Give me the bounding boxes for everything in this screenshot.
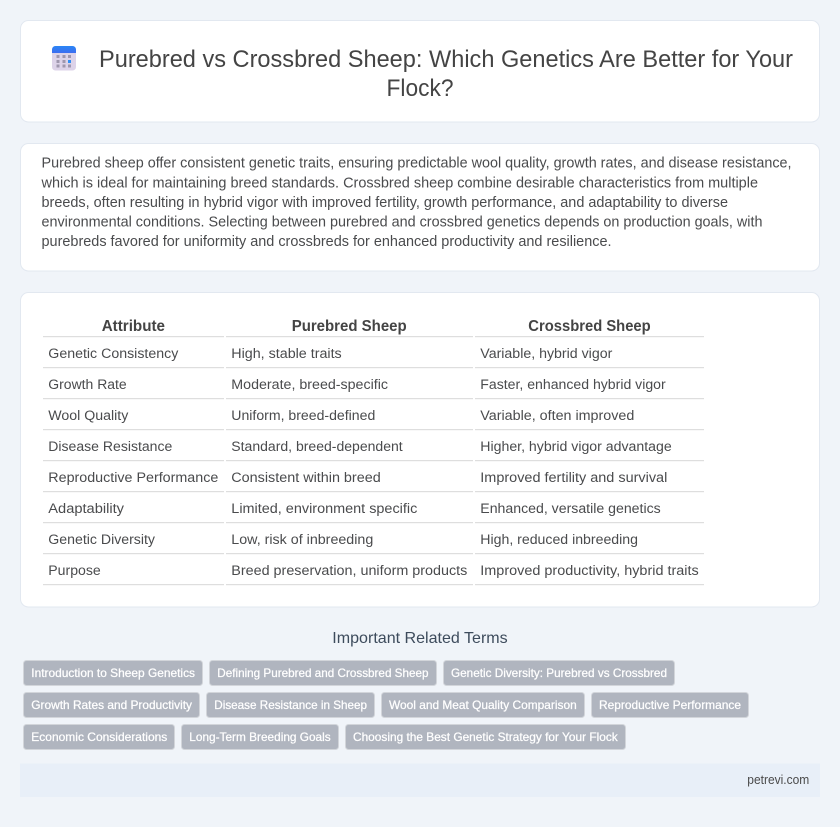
table row: adaptability: Enhanced, versatile genetics: [480, 501, 661, 517]
table row: growth rate: Moderate, breed-specific: [231, 377, 388, 393]
tag: disease resistance in sheep: [206, 692, 374, 718]
table row: wool quality: [48, 408, 634, 424]
related term tags: [24, 660, 748, 750]
tag: defining purebred and crossbred sheep: Defining Purebred and Crossbred Sheep: [217, 666, 429, 680]
tag: wool and meat quality comparison: Wool and Meat Quality Comparison: [389, 698, 577, 712]
table row: adaptability: Limited, environment specific: [231, 501, 417, 517]
table row: adaptability: [48, 501, 661, 517]
footer source: petrevi.com: [747, 772, 809, 787]
text block: introduction paragraph: environmental conditions. Selecting between purebred and crossbred genetics depends on production goals, with: [42, 214, 762, 230]
tag: introduction to sheep genetics: Introduction to Sheep Genetics: [31, 666, 195, 680]
table row: disease resistance: Standard, breed-dependent: [231, 439, 403, 455]
table row: purpose: Purpose: [48, 563, 101, 579]
table row: reproductive performance: Reproductive Performance: [48, 470, 218, 486]
tag: wool and meat quality comparison: [382, 692, 584, 718]
tag: introduction to sheep genetics: [24, 660, 202, 686]
table row: reproductive performance: Improved fertility and survival: [480, 470, 667, 486]
tag: defining purebred and crossbred sheep: [210, 660, 436, 686]
table row: purpose: Improved productivity, hybrid traits: [480, 563, 699, 579]
tag: disease resistance in sheep: Disease Resistance in Sheep: [214, 698, 367, 712]
table row: reproductive performance: Consistent within breed: [231, 470, 381, 486]
heading: important related terms: Important Related Terms: [332, 630, 508, 647]
tag: growth rates and productivity: Growth Rates and Productivity: [31, 698, 192, 712]
table row: wool quality: Wool Quality: [48, 408, 129, 424]
text block: introduction paragraph: which is ideal for maintaining breed standards. Crossbred sheep combine desirable characteristics from multiple: [40, 176, 758, 192]
tag: reproductive performance: Reproductive Performance: [599, 698, 741, 712]
table row: wool quality: Variable, often improved: [480, 408, 634, 424]
tag: choosing the best genetic strategy: [346, 724, 626, 750]
table header: Crossbred Sheep: [528, 318, 651, 335]
text block: introduction paragraph: purebreds favored for uniformity and crossbreds for enhanced productivity and resilience.: [42, 234, 612, 250]
table row: disease resistance: Disease Resistance: [48, 439, 172, 455]
icon: calendar: [52, 46, 76, 70]
title: Flock?: [386, 75, 454, 102]
table row: genetic consistency: Variable, hybrid vigor: [480, 346, 613, 362]
tag: genetic diversity: Genetic Diversity: Purebred vs Crossbred: [451, 666, 667, 680]
table row: genetic consistency: Genetic Consistency: [48, 346, 179, 362]
title: [99, 46, 793, 102]
table row: disease resistance: [48, 439, 672, 455]
table row: purpose: Breed preservation, uniform products: [231, 563, 467, 579]
table row: purpose: [48, 563, 699, 579]
text block: introduction paragraph: breeds, often resulting in hybrid vigor with improved fertility, growth performance, and adaptability to diverse: [42, 195, 728, 211]
table row: genetic diversity: Low, risk of inbreeding: [231, 532, 373, 548]
text block: introduction paragraph: [40, 156, 792, 250]
tag: genetic diversity: [444, 660, 674, 686]
tag: long-term breeding goals: [182, 724, 338, 750]
table row: reproductive performance: [48, 470, 667, 486]
table row: genetic diversity: [48, 532, 638, 548]
table header: [102, 318, 651, 335]
table row: genetic diversity: High, reduced inbreeding: [480, 532, 638, 548]
table row: disease resistance: Higher, hybrid vigor advantage: [480, 439, 672, 455]
panel: comparison table: [20, 292, 820, 607]
tag: reproductive performance: [592, 692, 748, 718]
table header: Purebred Sheep: [292, 318, 407, 335]
title: Purebred vs Crossbred Sheep: Which Genetics Are Better for Your: [99, 46, 793, 73]
text block: introduction paragraph: Purebred sheep offer consistent genetic traits, ensuring predictable wool quality, growth rates, and disease resistance,: [42, 156, 792, 172]
table row: genetic consistency: [48, 346, 613, 362]
table header: Attribute: [102, 318, 165, 335]
tag: growth rates and productivity: [24, 692, 200, 718]
tag: long-term breeding goals: Long-Term Breeding Goals: [189, 730, 331, 744]
footer: [20, 764, 820, 797]
panel: introduction: [20, 144, 820, 271]
table row: genetic consistency: High, stable traits: [231, 346, 342, 362]
tag: choosing the best genetic strategy: Choosing the Best Genetic Strategy for Your Flock: [353, 730, 619, 744]
table row: wool quality: Uniform, breed-defined: [231, 408, 375, 424]
tag: economic considerations: Economic Considerations: [31, 730, 167, 744]
table row: adaptability: Adaptability: [48, 501, 125, 517]
table row: growth rate: Growth Rate: [48, 377, 127, 393]
table row: growth rate: [48, 377, 666, 393]
table row: growth rate: Faster, enhanced hybrid vigor: [480, 377, 666, 393]
panel: title card: [20, 20, 820, 122]
tag: economic considerations: [24, 724, 174, 750]
table row: genetic diversity: Genetic Diversity: [48, 532, 156, 548]
